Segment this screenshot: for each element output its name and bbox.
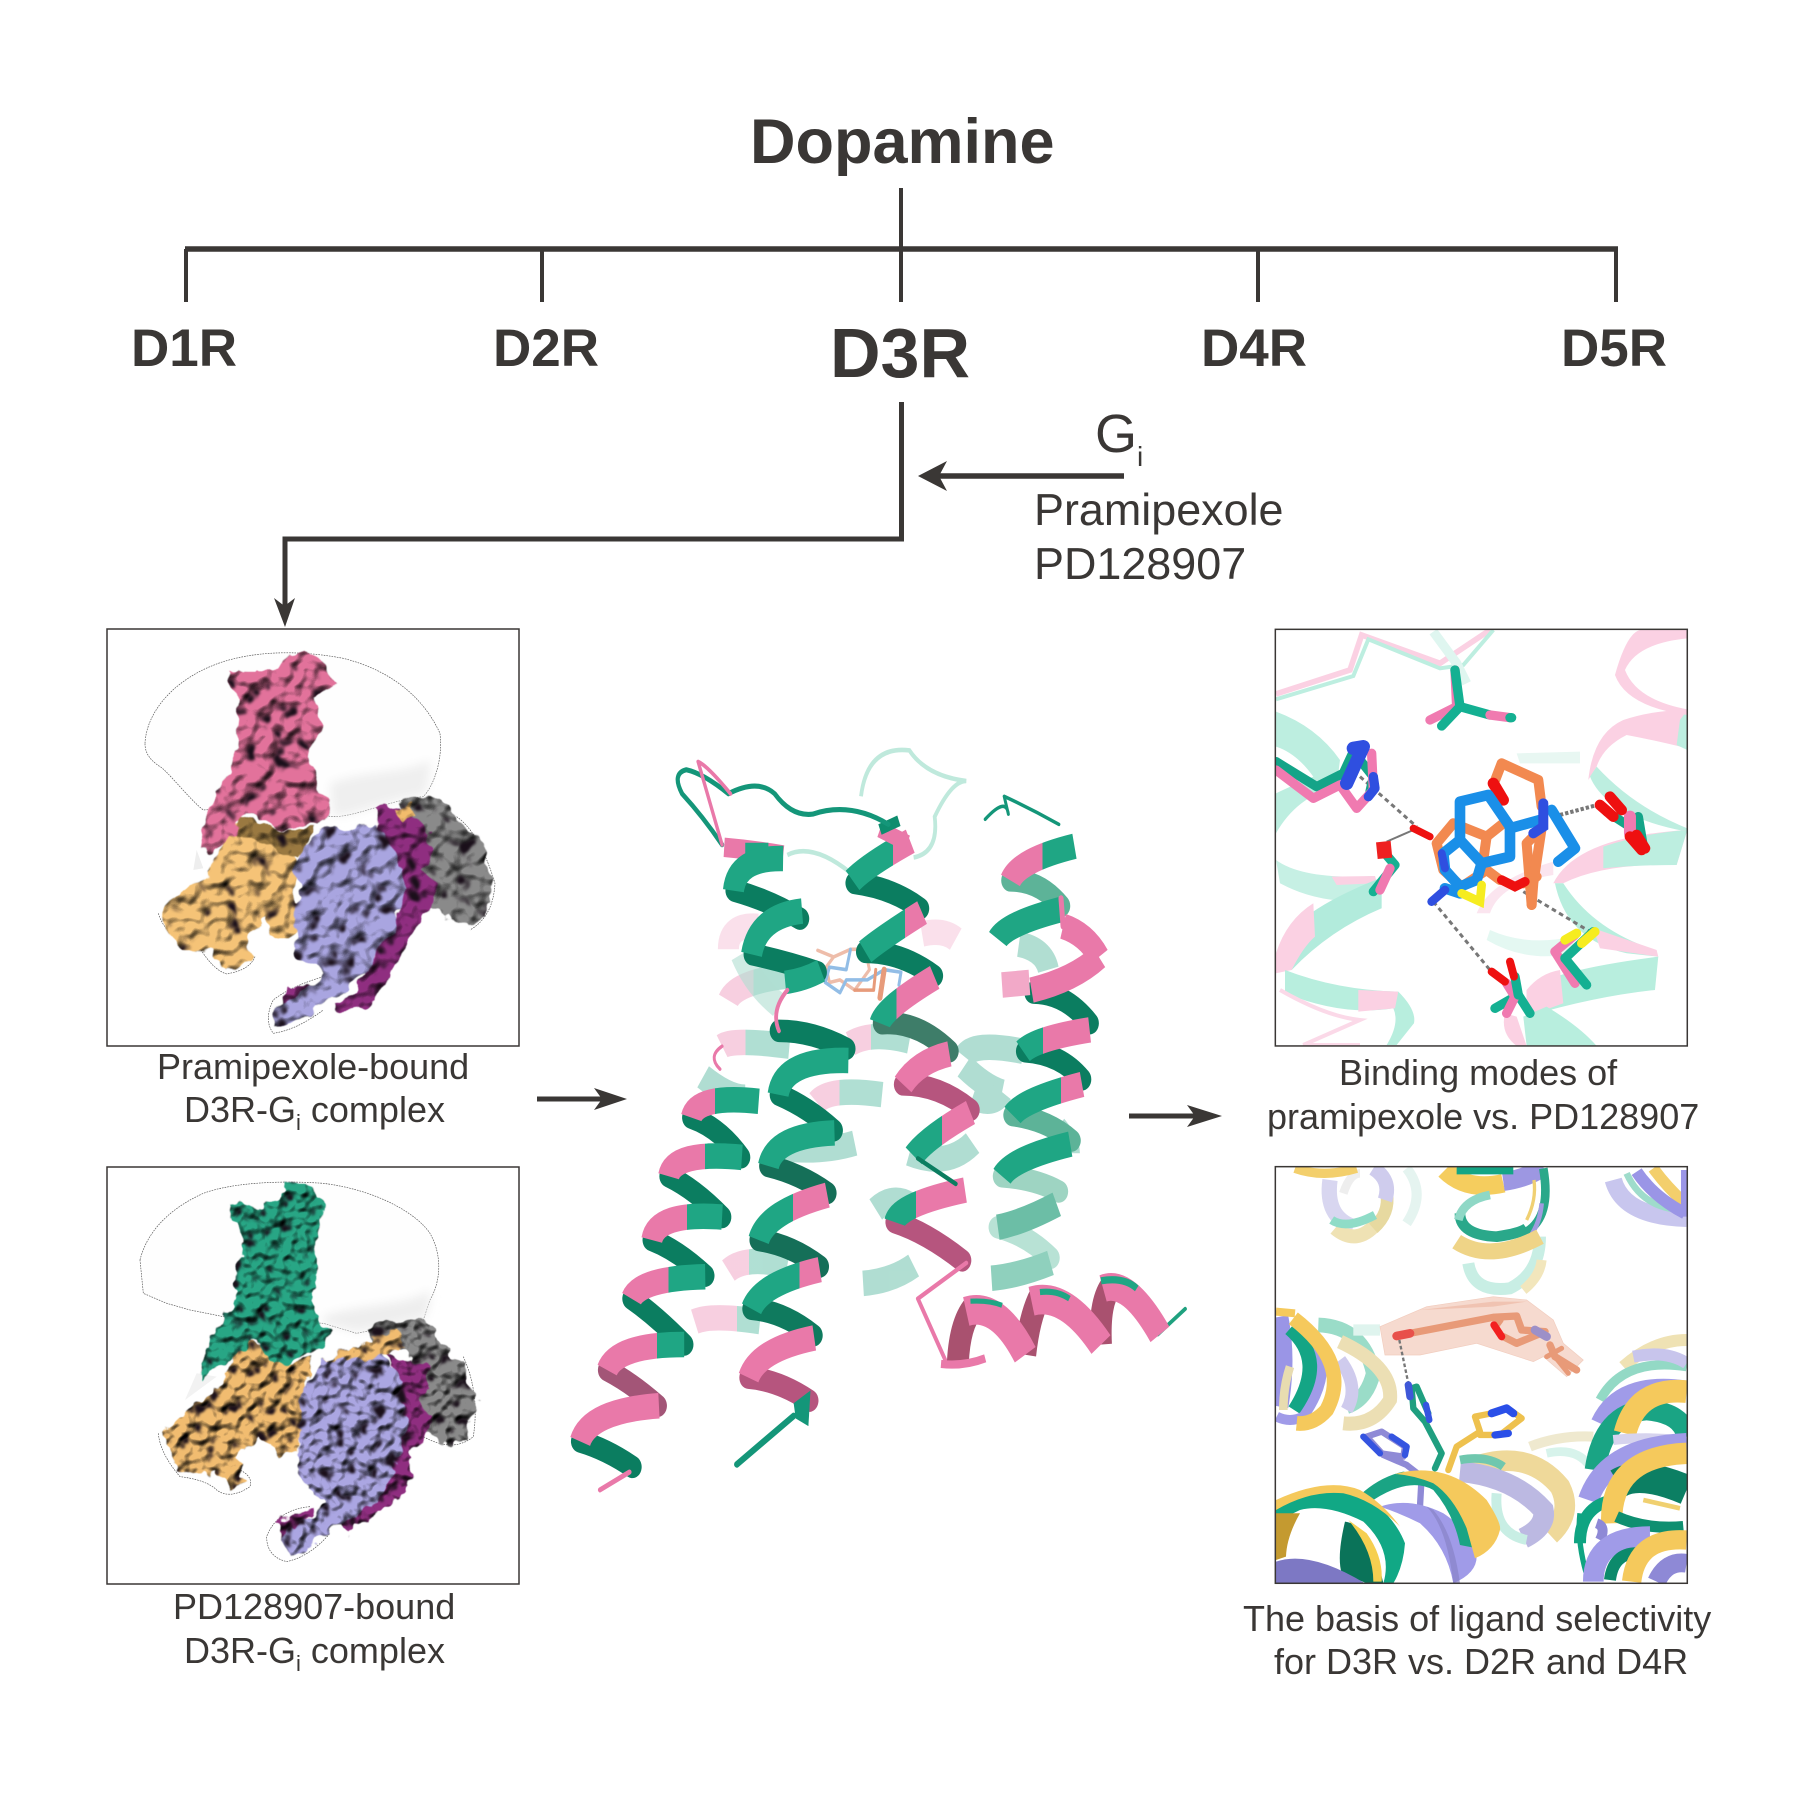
arrow: Gi and ligands into D3R [918,461,1124,491]
faded rear helices [1318,1168,1687,1540]
arrow: D3R down to complex panel [274,402,902,627]
right ribbon bands [1588,710,1687,780]
title: Dopamine: Dopamine [750,107,1055,177]
faded loop top [787,750,966,873]
caption: The basis of ligand selectivity: The basis of ligand selectivity [1243,1598,1711,1639]
micelle [140,1182,439,1333]
panel: ligand selectivity close-up [1275,1167,1687,1583]
arrow: overlay to details [1129,1105,1222,1127]
receptor tree connector lines [185,188,1618,302]
caption: Pramipexole-bound: Pramipexole-bound [157,1046,469,1087]
side chains [1276,670,1645,1013]
density [162,650,492,1027]
caption: pramipexole vs. PD128907: pramipexole vs. PD128907 [1267,1096,1699,1137]
caption: PD128907-bound: PD128907-bound [173,1586,455,1627]
transparent ribbons [1276,630,1493,699]
faded background helices [695,926,1069,1322]
receptor label D1R: D1R [131,319,237,378]
caption: D3R-Gi complex: D3R-G [184,1089,296,1130]
label: Gi: i [1137,441,1143,472]
caption: D3R-Gi complex second: i [296,1651,301,1676]
selectivity side chains [1363,1385,1522,1507]
left helix [1276,1312,1334,1423]
receptor label D2R: D2R [493,319,599,378]
ligand in pocket [818,949,901,998]
ligand: PD128907 orange [1437,763,1542,905]
bottom left helix [1276,1487,1405,1583]
caption: D3R-Gi complex: complex [301,1089,445,1130]
caption: for D3R vs. D2R and D4R: for D3R vs. D2R and D4R [1274,1641,1688,1682]
ligand density [1380,1297,1583,1377]
caption: Binding modes of: Binding modes of [1339,1052,1618,1093]
panel: binding modes close-up [1275,629,1687,1046]
caption: D3R-Gi complex second: complex [301,1630,445,1671]
micelle [145,653,441,817]
label: ligands: Pramipexole [1034,484,1284,535]
main top helix [1295,1167,1545,1251]
ligand: pramipexole blue [1443,795,1575,893]
ligand sticks [1410,1316,1577,1373]
left ribbon bands [1276,712,1340,833]
amphipathic helix 8 [941,1280,1160,1365]
thin loops [600,762,1185,1490]
dashed interaction lines [1360,777,1603,970]
receptor label D5R: D5R [1561,319,1667,378]
arrow: complexes to overlay [537,1088,627,1110]
receptor label D3R: D3R [830,314,970,392]
back turns dark [580,880,1090,1467]
caption: D3R-Gi complex: i [296,1110,301,1135]
front turns [580,821,1099,1441]
bottom central helix [1380,1503,1477,1583]
right helix stack [1579,1340,1687,1582]
panel: Pramipexole-bound cryo-EM map [107,629,519,1046]
receptor label D4R: D4R [1201,319,1307,378]
label: Gi: G [1095,404,1137,464]
caption: D3R-Gi complex second: D3R-G [184,1630,296,1671]
H-bond [1399,1340,1408,1383]
label: ligands: PD128907 [1034,538,1246,589]
density [162,1180,477,1555]
panel: PD128907-bound cryo-EM map [107,1167,519,1584]
chart: ribbon overlay of D3R helices [580,750,1185,1490]
